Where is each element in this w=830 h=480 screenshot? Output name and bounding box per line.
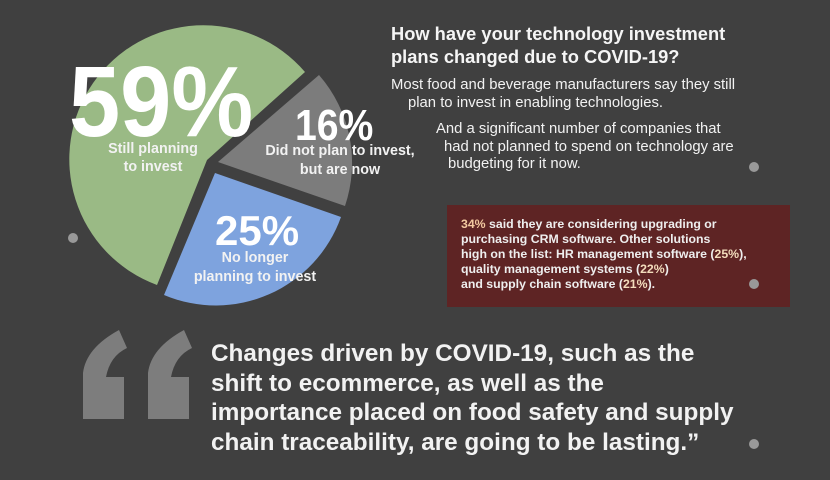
59% label: to invest: [124, 159, 182, 175]
callout text: high on the list: HR management software (25%),: [461, 247, 747, 261]
callout panel: [447, 205, 790, 307]
59% label: [108, 141, 198, 175]
16% label: [265, 143, 415, 178]
heading: plans changed due to COVID-19?: [391, 46, 679, 67]
intro text: Most food and beverage manufacturers say they still: [391, 77, 735, 93]
slice: still planning 59%: [69, 25, 305, 285]
intro text: [391, 77, 735, 111]
16% label: but are now: [300, 162, 380, 178]
16% value: 16%: [295, 101, 373, 150]
callout text: purchasing CRM software. Other solutions: [461, 232, 710, 246]
slice: did not plan 16%: [218, 75, 352, 206]
second paragraph: [436, 121, 734, 172]
quote text: Changes driven by COVID-19, such as the: [211, 340, 694, 367]
second paragraph: budgeting for it now.: [448, 156, 581, 172]
quote text: [211, 340, 734, 456]
quote text: importance placed on food safety and supply: [211, 399, 733, 426]
25% label: No longer: [222, 250, 288, 266]
25% label: planning to invest: [194, 269, 316, 285]
marker dot quote: [749, 439, 759, 449]
intro text: plan to invest in enabling technologies.: [408, 95, 663, 111]
callout text: quality management systems (22%): [461, 262, 669, 276]
25% label: [194, 250, 316, 285]
second paragraph: had not planned to spend on technology are: [444, 138, 734, 154]
second paragraph: And a significant number of companies that: [436, 121, 721, 137]
59% value: 59%: [69, 46, 253, 158]
heading: [391, 23, 725, 67]
marker dot callout: [749, 279, 759, 289]
16% label: Did not plan to invest,: [265, 143, 415, 159]
25% value: 25%: [215, 207, 299, 254]
quote text: chain traceability, are going to be lasting.”: [211, 428, 699, 456]
marker dot right: [749, 162, 759, 172]
callout text: [461, 217, 747, 291]
59% label: Still planning: [108, 141, 198, 157]
slice: no longer planning 25%: [164, 173, 341, 305]
quotation mark icon: [83, 330, 192, 419]
quote text: shift to ecommerce, as well as the: [211, 370, 604, 396]
heading: How have your technology investment: [391, 23, 725, 44]
marker dot left: [68, 233, 78, 243]
callout text: and supply chain software (21%).: [461, 277, 655, 291]
callout text: 34% said they are considering upgrading or: [461, 217, 717, 231]
